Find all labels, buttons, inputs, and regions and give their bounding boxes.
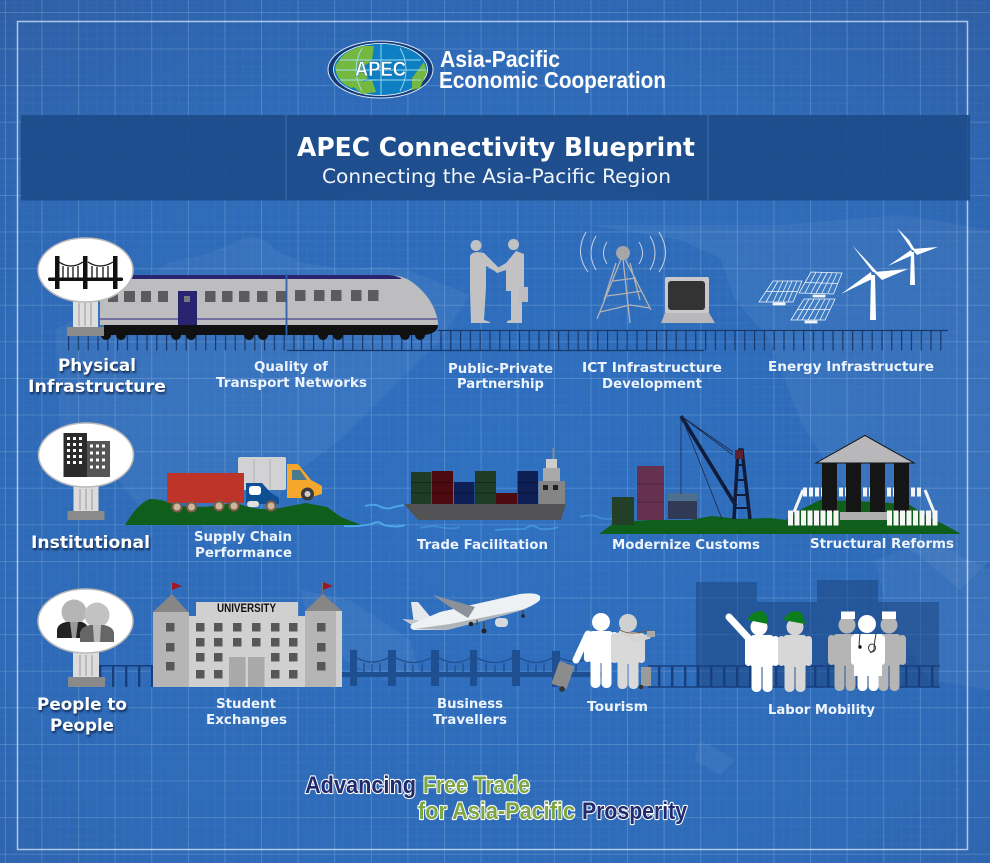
tagline: for Asia-Pacific — [418, 798, 575, 825]
APEC logo — [328, 41, 666, 98]
icon: suspension bridge — [342, 650, 607, 687]
logo emblem: APEC — [355, 58, 406, 81]
subtitle: Connecting the Asia-Pacific Region — [322, 165, 671, 188]
label: Student Exchanges: Student — [216, 697, 276, 712]
icon: red truck — [167, 473, 279, 512]
title banner — [21, 115, 970, 200]
label: Quality of Transport Networks: Quality of — [254, 360, 328, 375]
label: Labor Mobility: Labor Mobility — [768, 703, 876, 718]
world map overlay — [55, 215, 990, 775]
label: Public-Private Partnership — [448, 362, 553, 392]
pillar: institutional — [38, 423, 134, 520]
logo wordmark: Asia-Pacific — [440, 46, 560, 72]
icon: construction workers — [729, 611, 812, 692]
label: ICT Infrastructure Development: Development — [602, 377, 702, 392]
label: Business Travellers: Business — [437, 697, 503, 712]
icon: wind turbines — [841, 228, 938, 320]
icon: solar panels — [759, 272, 842, 323]
icon: government building with fence — [788, 436, 938, 520]
icon: university building: UNIVERSITY — [217, 603, 276, 615]
icon: silver truck — [238, 457, 322, 500]
label: Supply Chain Performance: Supply Chain — [194, 530, 292, 545]
pillar: people to people — [38, 589, 153, 687]
icon: two people — [57, 600, 114, 642]
pillar: physical infrastructure — [38, 238, 133, 336]
tagline — [305, 772, 688, 825]
icon: green hill — [125, 499, 361, 525]
label: Student Exchanges — [206, 697, 287, 728]
icon: medical staff — [828, 612, 906, 691]
heading: Physical Infrastructure — [28, 356, 166, 397]
label: Quality of Transport Networks — [216, 360, 367, 391]
icon: airplane — [402, 593, 540, 634]
tagline: Prosperity — [582, 798, 688, 825]
icon: office buildings — [64, 433, 110, 477]
label: Modernize Customs: Modernize Customs — [612, 538, 760, 553]
logo emblem — [328, 41, 433, 98]
title: APEC Connectivity Blueprint — [297, 133, 695, 163]
icon: university building — [153, 582, 342, 687]
label: Tourism: Tourism — [587, 700, 648, 715]
logo wordmark: Economic Cooperation — [439, 67, 666, 93]
label: Student Exchanges: Exchanges — [206, 713, 287, 728]
icon: skyline silhouette — [696, 580, 939, 687]
heading: Physical Infrastructure: Physical — [58, 356, 136, 376]
icon: container ship — [404, 448, 566, 520]
icon: handshake — [470, 239, 528, 323]
heading: Institutional: Institutional — [31, 533, 150, 553]
icon: customs containers and crane — [612, 416, 750, 525]
heading: People to People: People to — [37, 695, 127, 715]
label: Supply Chain Performance: Performance — [195, 546, 292, 561]
railway track row 1 — [68, 330, 948, 350]
icon: laptop — [661, 277, 715, 323]
tagline: Advancing — [305, 772, 416, 799]
label: Trade Facilitation: Trade Facilitation — [417, 538, 548, 553]
icon: port ground — [599, 500, 961, 534]
icon: water waves — [344, 505, 614, 530]
label: Supply Chain Performance — [194, 530, 292, 561]
heading: Physical Infrastructure: Infrastructure — [28, 377, 166, 397]
label: Public-Private Partnership: Partnership — [457, 377, 544, 392]
icon: communications tower — [580, 232, 666, 323]
heading: People to People — [37, 695, 127, 736]
label: Business Travellers: Travellers — [433, 713, 507, 728]
label: Quality of Transport Networks: Transport Networks — [216, 376, 367, 391]
label: ICT Infrastructure Development — [582, 361, 722, 392]
label: Structural Reforms: Structural Reforms — [810, 537, 954, 552]
icon: bullet train — [100, 273, 438, 340]
label: Public-Private Partnership: Public-Private — [448, 362, 553, 377]
label: ICT Infrastructure Development: ICT Infrastructure — [582, 361, 722, 376]
heading: People to People: People — [50, 716, 114, 736]
label: Energy Infrastructure: Energy Infrastructure — [768, 360, 934, 375]
railway track row 3 — [648, 666, 940, 687]
label: Business Travellers — [433, 697, 507, 728]
tagline: Free Trade — [423, 772, 530, 799]
logo wordmark — [439, 46, 666, 93]
icon: tourists — [551, 613, 655, 692]
icon: bridge — [48, 256, 123, 289]
